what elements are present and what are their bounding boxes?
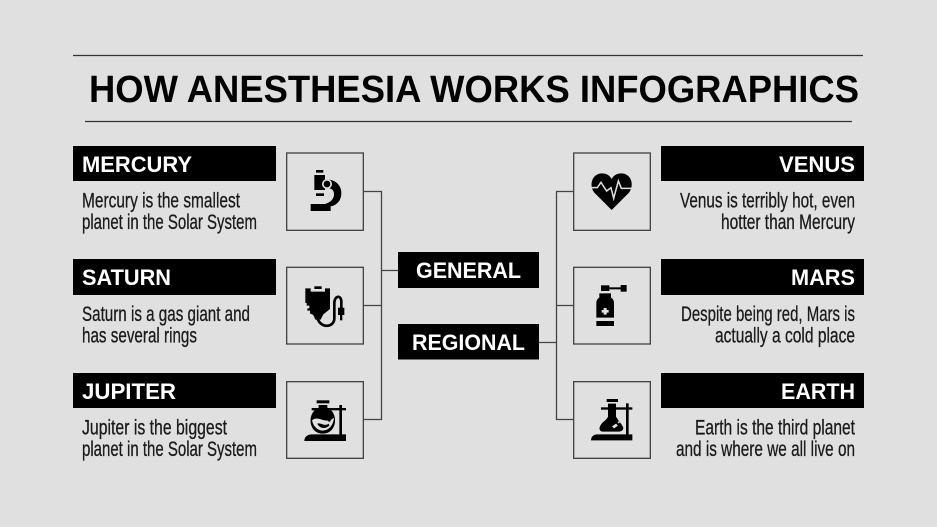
panel: jupiter [73,373,276,461]
title: HOW ANESTHESIA WORKS INFOGRAPHICS [89,69,859,111]
panel: regional label: REGIONAL [412,330,525,355]
panel: venus: VENUS [779,152,855,177]
panel: saturn: Saturn is a gas giant and [82,302,250,326]
icon: heart with pulse [574,153,650,230]
icon: spray bottle [574,267,650,344]
panel: mercury: Mercury is the smallest [82,188,240,212]
panel: general label: GENERAL [416,258,521,283]
panel: saturn: has several rings [82,324,197,348]
panel: jupiter: JUPITER [82,379,176,404]
panel: saturn: SATURN [82,265,171,290]
panel: earth: and is where we all live on [676,437,855,461]
panel: earth [661,373,864,461]
icon: microscope [287,153,363,230]
panel: mercury: planet in the Solar System [82,210,257,234]
panel: mars: MARS [791,265,855,290]
panel: mercury: MERCURY [82,152,192,177]
panel: earth: Earth is the third planet [695,416,855,440]
panel: jupiter: planet in the Solar System [82,437,257,461]
connector: left bracket [364,192,398,420]
panel: saturn [73,259,276,348]
connector: right bracket [539,192,573,420]
icon: conical flask on stand [574,382,650,458]
panel: general label [398,252,539,288]
icon: flask on stand [287,382,363,458]
panel: mars: Despite being red, Mars is [681,302,855,326]
panel: venus [661,146,864,234]
panel: mars: actually a cold place [715,324,855,348]
panel: venus: Venus is terribly hot, even [680,188,855,212]
icon: iv bag [287,267,363,344]
panel: mars [661,259,864,348]
panel: regional label [398,324,539,360]
panel: venus: hotter than Mercury [721,210,855,234]
panel: earth: EARTH [781,379,855,404]
panel: mercury [73,146,276,234]
panel: jupiter: Jupiter is the biggest [82,416,227,440]
